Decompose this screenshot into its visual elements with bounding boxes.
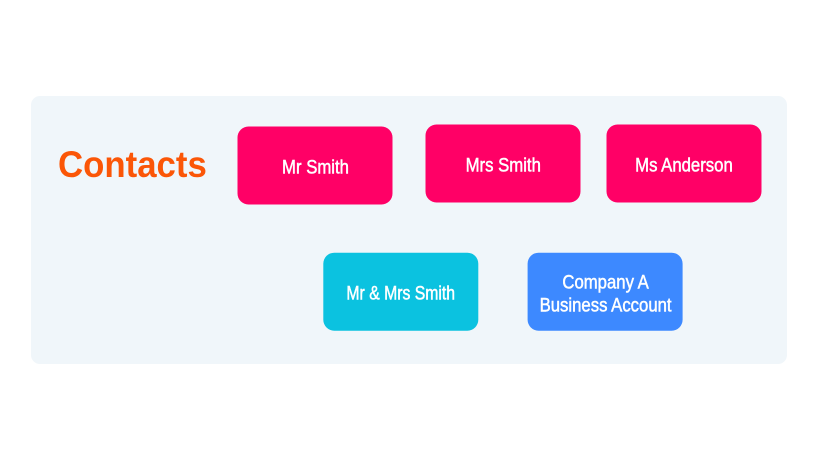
card: Ms Anderson [606, 124, 762, 202]
card: Mr & Mrs Smith: Mr & Mrs Smith [346, 283, 455, 304]
card: Mrs Smith [426, 124, 580, 202]
card: Mrs Smith: Mrs Smith [465, 155, 541, 176]
panel: contacts background [31, 96, 787, 364]
card: Company A Business Account [528, 253, 683, 331]
heading: Contacts: Contacts [58, 144, 207, 185]
card: Mr & Mrs Smith [323, 253, 478, 331]
card: Company A Business Account: Business Account [539, 296, 671, 317]
card: Ms Anderson: Ms Anderson [635, 155, 733, 176]
card: Company A Business Account: Company A [562, 273, 648, 294]
card: Mr Smith: Mr Smith [282, 157, 348, 178]
card: Mr Smith [238, 126, 392, 204]
